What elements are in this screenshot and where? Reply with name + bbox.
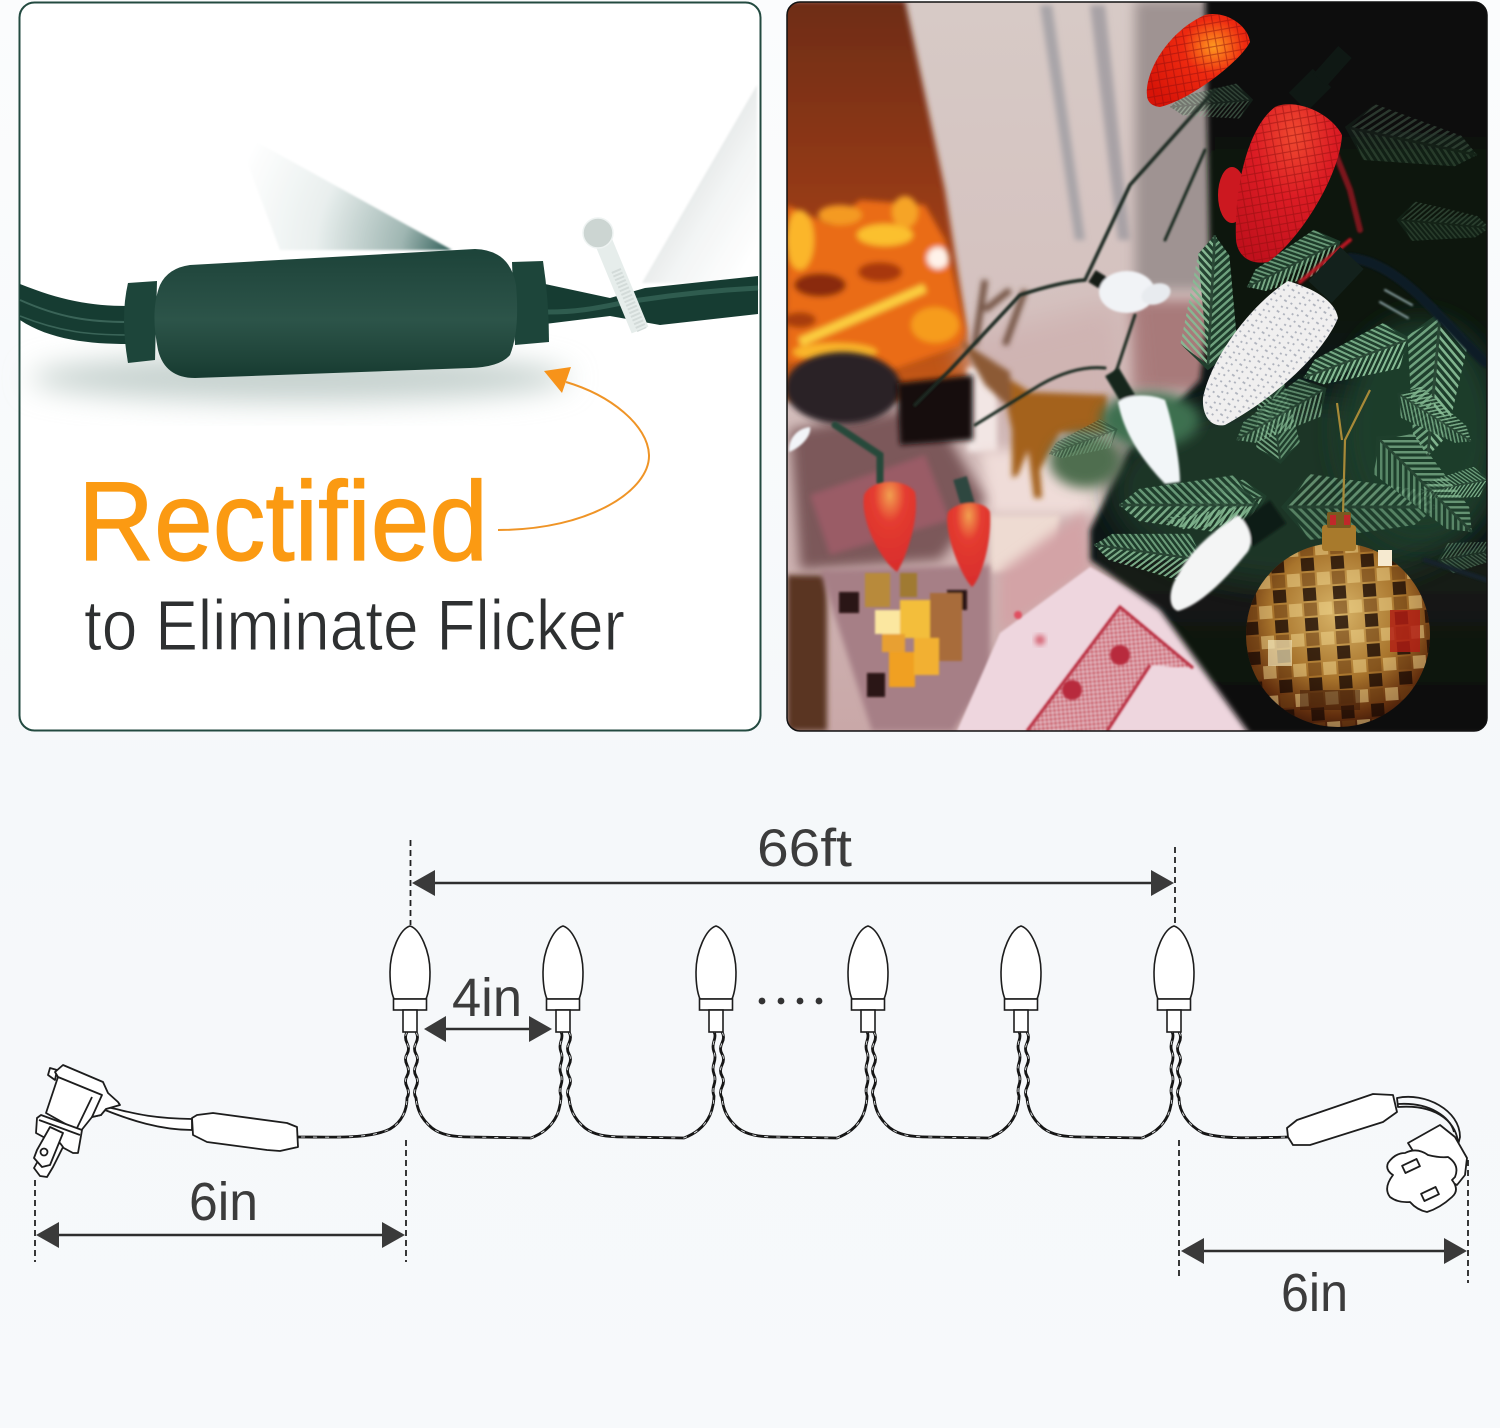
fir branches (1044, 82, 1500, 585)
red bulb: lantern left (863, 482, 916, 572)
dimension: 66ft (410, 819, 1175, 925)
red bulb: lantern right (947, 478, 990, 587)
photo border (787, 2, 1487, 731)
zip tie (583, 218, 642, 330)
subheading: to Eliminate Flicker: to Eliminate Flicker (84, 587, 625, 666)
rectifier module (124, 249, 549, 378)
red bulb: top (1147, 14, 1250, 107)
white bulb: large (1203, 258, 1352, 425)
blurred lantern house (785, 352, 990, 731)
dark tree mass (1049, 0, 1500, 735)
dimension diagram (34, 819, 1468, 1323)
white bulb: middle (1112, 372, 1180, 484)
lantern windows (839, 573, 967, 697)
dimension: 4in: 4in (452, 968, 522, 1028)
ellipsis dots (759, 998, 822, 1004)
dimension: 6in left (35, 1140, 406, 1262)
dimension: 4in (424, 968, 552, 1042)
bulb 1 (390, 926, 430, 1032)
blurred gift box (957, 567, 1252, 731)
red bulb: behind (1218, 167, 1242, 223)
dimension: 6in right: 6in (1281, 1263, 1348, 1323)
dimension: 66ft: 66ft (757, 819, 852, 878)
light string wires (835, 90, 1487, 580)
arrow: orange curved pointer (498, 367, 649, 530)
bulb 3 (696, 926, 736, 1032)
dimension: 6in right (1179, 1140, 1468, 1323)
ornament string (1337, 390, 1370, 515)
dimension: 6in left: 6in (189, 1172, 258, 1232)
gold disco ball ornament (1246, 512, 1430, 727)
bulb 5 (1001, 926, 1041, 1032)
cables (20, 276, 758, 344)
white bulb: small upper (1092, 271, 1174, 313)
bulb 4 (848, 926, 888, 1032)
blurred room background (788, 2, 1244, 730)
white bulb: left edge (789, 427, 810, 452)
bulb 2 (543, 926, 583, 1032)
icon: female socket with controller (1287, 1094, 1467, 1212)
soft shadow under module (30, 354, 570, 402)
hang tag with shadow (235, 85, 757, 283)
string wires (298, 1032, 1288, 1138)
bulb 6 (1154, 926, 1194, 1032)
panel: rectified module photo (20, 2, 760, 730)
blurred reindeer (960, 280, 1107, 498)
heading: Rectified: Rectified (78, 459, 488, 584)
icon: male plug with controller (34, 1065, 298, 1177)
blurred fire (784, 196, 965, 372)
white bulb: lower (1170, 512, 1278, 611)
red bulb: large (1236, 52, 1345, 263)
panel: Christmas tree photo (780, 0, 1500, 735)
